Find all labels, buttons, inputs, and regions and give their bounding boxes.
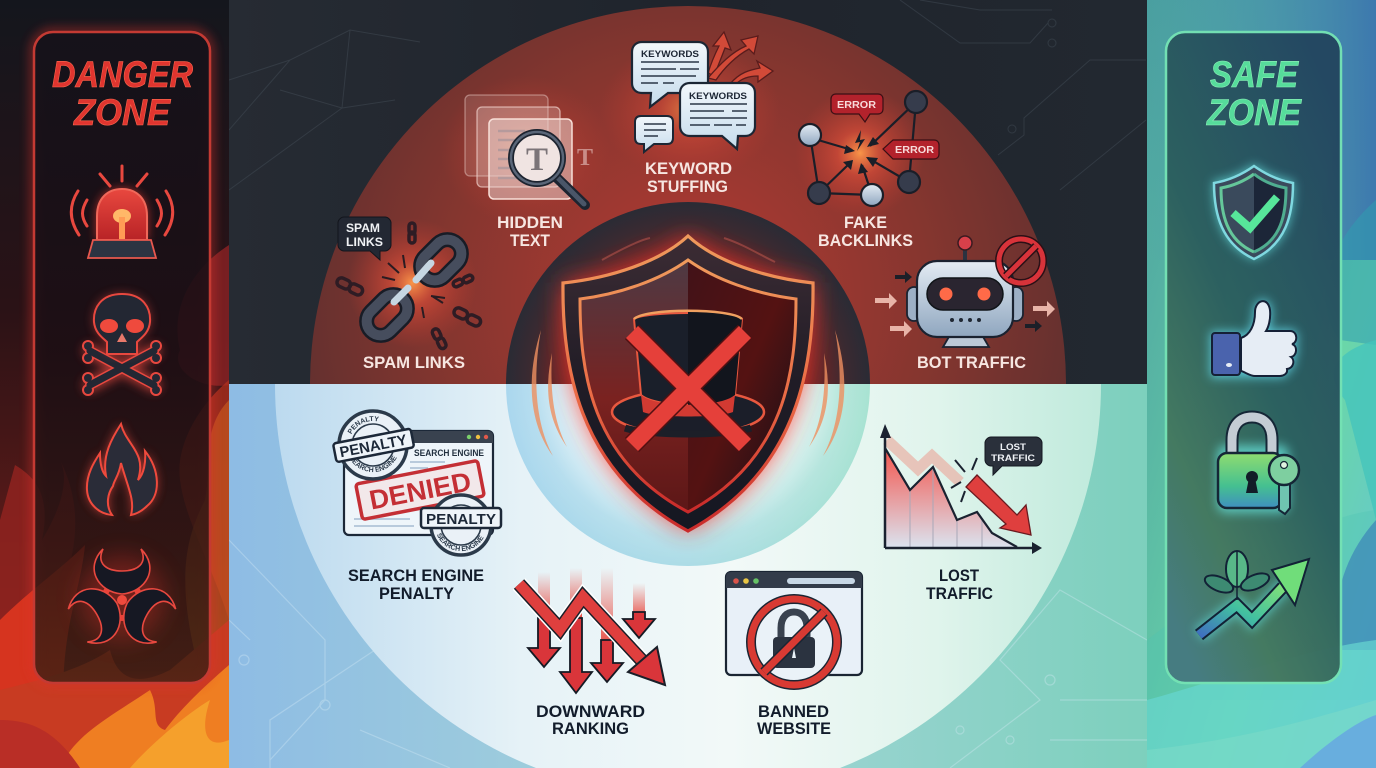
- label: downward ranking: [536, 703, 645, 738]
- icon: denied browser window with stamps: PENALTY: [348, 416, 379, 434]
- item: spam links: [336, 217, 482, 372]
- label: fake backlinks: BACKLINKS: [818, 232, 913, 250]
- icon: denied browser window with stamps: [332, 409, 502, 557]
- icon: link network with errors: ERROR: [837, 99, 876, 111]
- icon: denied browser window with stamps: SEARCH ENGINE: [351, 455, 397, 472]
- icon: speech bubble spam links: LINKS: [346, 237, 383, 249]
- top hat: [612, 311, 764, 434]
- icon: broken chain: [336, 223, 482, 350]
- right panel: safe zone: [1166, 32, 1341, 683]
- red semicircle: black hat tactics zone: [310, 6, 1066, 384]
- icon: speech bubble spam links: [338, 217, 391, 260]
- left panel: danger zone: [34, 32, 210, 683]
- item: bot traffic: [875, 236, 1055, 372]
- icon: siren: [71, 166, 173, 258]
- icon: translucent text pages and magnifier: T: [526, 142, 548, 178]
- icon: denied browser window with stamps: PENALTY: [426, 512, 496, 528]
- label: banned website: [757, 703, 831, 738]
- icon: link network with errors: [799, 91, 939, 206]
- heading: danger zone: [52, 54, 193, 133]
- light semicircle: consequences zone: [275, 384, 1101, 768]
- right strip: safe zone background: [1147, 0, 1376, 768]
- label: keyword stuffing: STUFFING: [647, 178, 728, 196]
- icon: keyword speech bubbles: KEYWORDS: [689, 91, 747, 102]
- item: banned website: [726, 572, 862, 738]
- inner circle behind shield: [506, 202, 870, 566]
- icon: growth arrow with leaves: [1199, 551, 1309, 635]
- icon: falling traffic chart: TRAFFIC: [991, 453, 1035, 464]
- label: keyword stuffing: [645, 160, 732, 196]
- icon: denied browser window with stamps: DENIED: [367, 466, 474, 516]
- heading: danger zone: ZONE: [73, 92, 171, 133]
- label: banned website: WEBSITE: [757, 720, 831, 738]
- icon: denied browser window with stamps: SEARCH ENGINE: [414, 448, 484, 458]
- center background: light lower half: [229, 384, 1147, 768]
- icon: denied browser window with stamps: SEARCH ENGINE: [437, 533, 484, 552]
- shield outer band: [563, 236, 813, 531]
- label: hidden text: HIDDEN: [497, 214, 563, 232]
- icon: flame: [87, 424, 157, 515]
- label: bot traffic: BOT TRAFFIC: [917, 354, 1026, 372]
- item: search engine penalty: [332, 409, 502, 603]
- label: downward ranking: RANKING: [552, 720, 629, 738]
- icon: browser with banned lock: [726, 572, 862, 690]
- left strip: flames background: [0, 0, 229, 768]
- heading: danger zone: DANGER: [52, 54, 193, 95]
- label: hidden text: TEXT: [510, 232, 550, 250]
- icon: keyword speech bubbles: KEYWORDS: [641, 49, 699, 60]
- label: fake backlinks: FAKE: [844, 214, 887, 232]
- icon: padlock and key: [1217, 417, 1299, 514]
- label: spam links: SPAM LINKS: [363, 354, 465, 372]
- label: search engine penalty: SEARCH ENGINE: [348, 567, 484, 585]
- central shield with crossed-out top hat: [532, 236, 844, 531]
- item: hidden text: [440, 75, 610, 250]
- item: lost traffic: [880, 424, 1042, 603]
- icon: shield with check: [1213, 164, 1294, 260]
- red X: [632, 332, 745, 445]
- label: keyword stuffing: KEYWORD: [645, 160, 732, 178]
- icon: translucent text pages and magnifier: T: [577, 145, 593, 171]
- icon: speech bubble spam links: SPAM: [346, 223, 380, 235]
- icon: falling traffic chart: LOST: [1000, 442, 1026, 453]
- label: hidden text: [497, 214, 563, 250]
- label: banned website: BANNED: [758, 703, 829, 721]
- heading: safe zone: ZONE: [1206, 92, 1302, 133]
- item: fake backlinks: [795, 88, 939, 250]
- shield inner face: [580, 260, 796, 512]
- label: lost traffic: TRAFFIC: [926, 585, 993, 603]
- icon: keyword speech bubbles: [632, 42, 755, 152]
- item: downward ranking: [519, 568, 665, 738]
- center background: dark upper half: [229, 0, 1147, 384]
- icon: robot with prohibition sign: [875, 236, 1055, 347]
- icon: translucent text pages and magnifier: [465, 95, 593, 205]
- icon: link network with errors: ERROR: [895, 144, 934, 156]
- icon: outgoing arrows: [708, 32, 773, 84]
- label: search engine penalty: PENALTY: [379, 585, 454, 603]
- heading: safe zone: [1206, 54, 1302, 133]
- label: lost traffic: LOST: [939, 567, 979, 585]
- label: downward ranking: DOWNWARD: [536, 703, 645, 721]
- label: search engine penalty: [348, 567, 484, 603]
- heading: safe zone: SAFE: [1210, 54, 1299, 95]
- icon: skull and crossbones: [82, 294, 162, 396]
- icon: falling traffic chart: [880, 424, 1042, 554]
- label: fake backlinks: [818, 214, 913, 250]
- item: keyword stuffing: [600, 32, 780, 196]
- icon: biohazard: [64, 549, 180, 650]
- icon: thumbs up: [1212, 301, 1296, 376]
- label: lost traffic: [926, 567, 993, 603]
- icon: falling arrows: [519, 568, 665, 693]
- icon: denied browser window with stamps: PENALTY: [338, 432, 408, 461]
